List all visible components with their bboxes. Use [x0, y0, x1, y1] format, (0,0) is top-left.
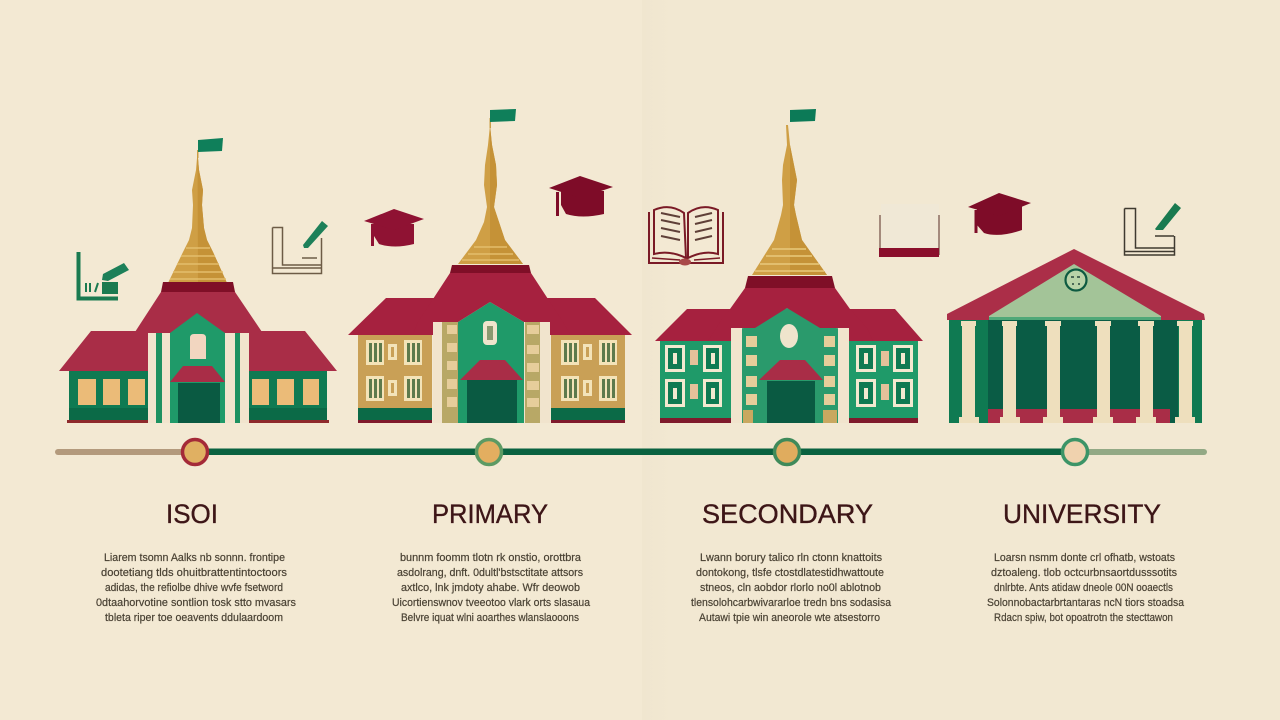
building: school: [59, 138, 337, 423]
left and right wings: [348, 298, 632, 423]
spire: [168, 152, 227, 283]
central block: [148, 313, 249, 423]
description: ISOI: Liarem tsomn Aalks nb sonnn. frontipe: [104, 552, 285, 564]
timeline: [55, 440, 1207, 464]
description: primary: [392, 552, 591, 624]
description: university: dnlrbte. Ants atidaw dneole 00N ooaectls: [994, 582, 1173, 594]
description: ISOI: 0dtaahorvotine sontlion tosk stto mvasars: [96, 597, 296, 609]
column: ISOI: [96, 499, 296, 624]
icon: graduation cap left: [364, 209, 424, 246]
building: secondary: [655, 109, 923, 423]
spire: [458, 125, 523, 264]
roof band: [745, 276, 835, 288]
flag: [790, 109, 816, 122]
description: secondary: Autawi tpie win aneorole wte atsestorro: [699, 612, 880, 624]
node: ISOI: [182, 440, 208, 464]
columns: [959, 321, 1195, 423]
description: secondary: dontokong, tlsfe ctostdlatestidhwattoute: [696, 567, 884, 579]
description: university: Solonnobactarbrtantaras ncN tiors stoadsa: [987, 597, 1185, 609]
column: secondary: [691, 499, 892, 624]
description: ISOI: dootetiang tlds ohuitbrattentintoctoors: [101, 567, 287, 579]
description: primary: Uicortienswnov tveeotoo vlark orts slasaua: [392, 597, 591, 609]
description: primary: Belvre iquat wlni aoarthes wlanslaooons: [401, 612, 579, 624]
description: secondary: tlensolohcarbwivararloe tredn bns sodasisa: [691, 597, 892, 609]
column: university: [987, 499, 1185, 624]
icon: ruler and pencil: [78, 252, 129, 298]
heading: secondary: SECONDARY: [702, 499, 873, 529]
pediment: [947, 249, 1205, 320]
description: ISOI: adidas, the refiolbe dhive wvfe fsetword: [105, 582, 283, 594]
main roof: [413, 273, 570, 334]
description: primary: bunnm foomm tlotn rk onstio, orottbra: [400, 552, 582, 564]
column: primary: [392, 499, 591, 624]
walls: [949, 320, 1202, 423]
icon: ruler and pencil right: [1124, 203, 1181, 255]
description: university: dztoaleng. tlob octcurbnsaortdusssotits: [991, 567, 1177, 579]
main roof: [135, 292, 262, 371]
description: university: Rdacn spiw, bot opoatrotn the stecttawon: [994, 612, 1173, 624]
windows: [366, 340, 617, 401]
main roof: [708, 288, 873, 341]
central block: [731, 308, 849, 423]
flag: [197, 138, 223, 158]
windows: [665, 345, 913, 407]
node: primary: [476, 440, 502, 464]
roof band: [450, 265, 531, 273]
spire: [752, 125, 827, 275]
icon: book outline and pencil: [272, 221, 328, 274]
icon: graduation cap right: [968, 193, 1031, 235]
node: university: [1062, 440, 1088, 464]
heading: primary: PRIMARY: [432, 499, 548, 529]
description: secondary: [691, 552, 892, 624]
building: primary: [348, 109, 632, 423]
roof band: [161, 282, 235, 292]
description: ISOI: [96, 552, 296, 624]
heading: university: UNIVERSITY: [1003, 499, 1161, 529]
description: primary: axtlco, lnk jmdoty ahabe. Wfr deowob: [401, 582, 580, 594]
description: ISOI: tbleta riper toe oeavents ddulaardoom: [105, 612, 283, 624]
central block: [433, 302, 550, 423]
description: university: [987, 552, 1185, 624]
left and right wings: [59, 331, 337, 423]
description: secondary: Lwann borury talico rln ctonn knattoits: [700, 552, 882, 564]
heading: ISOI: ISOI: [166, 499, 218, 529]
flag: [490, 109, 516, 128]
left and right wings: [655, 309, 923, 423]
description: primary: asdolrang, dnft. 0dultl'bstsctitate attsors: [397, 567, 583, 579]
description: university: Loarsn nsmm donte crl ofhatb, wstoats: [994, 552, 1175, 564]
description: secondary: stneos, cln aobdor rlorlo no0l ablotnob: [700, 582, 881, 594]
icon: graduation cap middle: [549, 176, 613, 216]
icon: open book: [649, 207, 723, 266]
icon: faded book: [879, 204, 939, 257]
building: university: [947, 249, 1205, 423]
node: secondary: [774, 440, 800, 464]
